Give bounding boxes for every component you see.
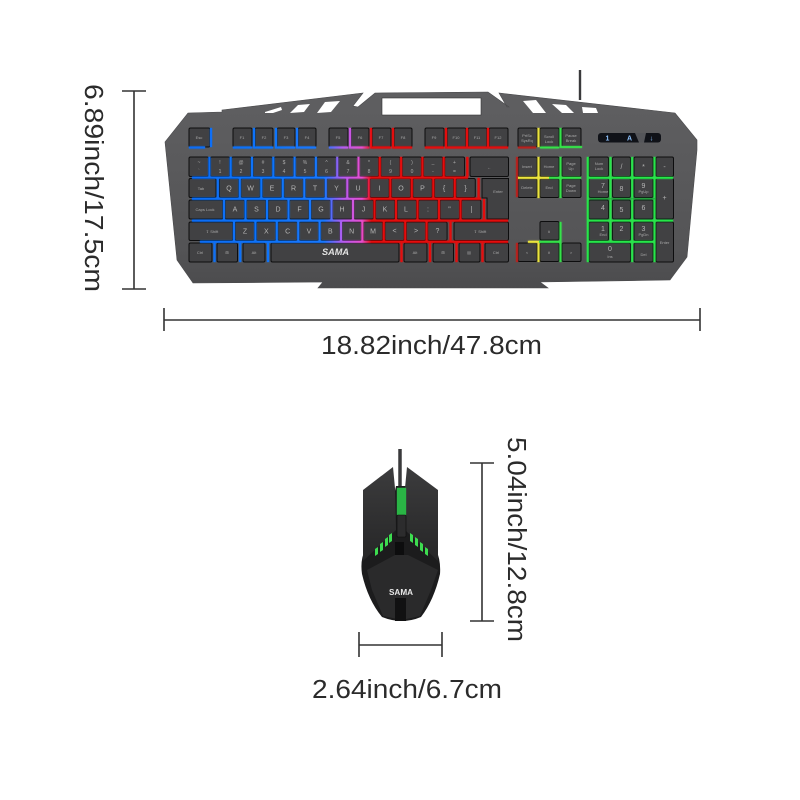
small key legends: F1 (240, 135, 245, 140)
small key legends: F12 (495, 135, 502, 140)
number row legends: 0 (411, 169, 414, 175)
ventilation slots (265, 100, 598, 113)
number row legends: * (368, 160, 370, 166)
letter and symbol legends: * (642, 164, 645, 171)
small key legends: F6 (358, 135, 363, 140)
number row legends: 4 (283, 169, 286, 175)
small key legends: > (570, 250, 573, 255)
letter and symbol legends: F (297, 206, 302, 214)
palm stripe (395, 598, 406, 621)
small key legends: Tab (198, 186, 205, 191)
small key legends: F9 (432, 135, 437, 140)
main block backlight (189, 128, 508, 262)
small key legends: End (599, 232, 607, 237)
small key legends: PrtSc (522, 133, 532, 138)
letter and symbol legends: L (404, 206, 408, 214)
letter and symbol legends: C (285, 228, 290, 236)
letter and symbol legends: 3 (642, 226, 646, 233)
left side lights (375, 533, 392, 556)
letter and symbol legends: S (254, 206, 259, 214)
number row legends: & (346, 160, 350, 166)
small key legends: Num (595, 161, 604, 166)
small key legends: Down (566, 188, 576, 193)
small key legends: Ins (607, 254, 613, 259)
small key legends: F11 (474, 135, 481, 140)
scroll base (395, 542, 404, 556)
small key legends: PgDn (638, 232, 649, 237)
letter and symbol legends: I (379, 186, 381, 192)
main key block (189, 157, 508, 262)
lock indicator panel: A (627, 136, 632, 142)
lock indicator panel: 1 (606, 136, 610, 142)
letter and symbol legends: M (370, 228, 376, 236)
letter and symbol legends: > (414, 228, 418, 235)
small key legends: Home (544, 164, 555, 169)
small key legends: Alt (252, 250, 257, 255)
left button (363, 467, 396, 561)
height dimension: mouse: 5.04inch/12.8cm (502, 437, 530, 642)
small key legends: End (545, 185, 553, 190)
letter and symbol legends: < (392, 228, 397, 235)
letter and symbol legends: : (427, 206, 429, 214)
small key legends: ▤ (467, 250, 471, 255)
small key legends: Break (566, 138, 576, 143)
height dimension: keyboard (79, 84, 146, 292)
number row legends: 5 (304, 169, 307, 175)
number row legends: ` (198, 169, 200, 175)
small key legends: Ctrl (493, 250, 499, 255)
letter and symbol legends: + (662, 195, 667, 202)
number row legends: @ (238, 160, 244, 166)
letter and symbol legends: / (621, 164, 623, 171)
navigation keys (518, 157, 581, 262)
mouse (361, 449, 440, 621)
letter and symbol legends: G (318, 206, 324, 214)
small key legends: Alt (413, 250, 418, 255)
letter and symbol legends: Z (243, 228, 248, 236)
keyboard (165, 92, 697, 288)
letter and symbol legends: 4 (601, 205, 605, 212)
letter and symbol legends: " (448, 206, 451, 214)
letter and symbol legends: 7 (601, 183, 605, 190)
letter and symbol legends: O (398, 186, 404, 192)
numeric keypad (589, 157, 674, 262)
height dimension: keyboard: 6.89inch/17.5cm (79, 84, 107, 292)
number row legends: 7 (347, 169, 350, 175)
small key legends: Enter (660, 240, 670, 245)
keyboard cable (579, 70, 581, 100)
small key legends: Esc (196, 135, 202, 140)
width dimension: keyboard (164, 308, 700, 360)
letter and symbol legends: 9 (642, 183, 646, 190)
right side lights (410, 533, 428, 556)
lock indicator panel (598, 133, 661, 142)
letter and symbol legends: E (270, 186, 275, 192)
mouse lower body (361, 486, 440, 621)
small key legends: ← (487, 165, 491, 170)
number row legends: _ (431, 160, 435, 166)
width dimension: mouse: 2.64inch/6.7cm (312, 676, 502, 704)
small key legends: F2 (262, 135, 267, 140)
number row legends: 6 (325, 169, 328, 175)
right button (405, 467, 438, 561)
letter and symbol legends: B (328, 228, 333, 236)
letter and symbol legends: D (275, 206, 281, 214)
mouse cable (398, 449, 402, 492)
number row legends: # (262, 160, 265, 166)
letter and symbol legends: { (443, 186, 446, 192)
letter and symbol legends: 2 (620, 226, 624, 233)
letter and symbol legends: 5 (620, 207, 624, 214)
small key legends: Home (598, 189, 609, 194)
number row legends (198, 160, 456, 175)
letter and symbol legends: | (471, 206, 473, 214)
number row legends: % (303, 160, 308, 166)
number row legends: ) (411, 160, 413, 166)
letter and symbol legends: N (349, 228, 354, 236)
letter and symbol legends: X (264, 228, 269, 236)
small key legends: Insert (522, 164, 533, 169)
small key legends: < (526, 250, 529, 255)
letter and symbol legends: 1 (601, 226, 605, 233)
small key legends: PgUp (638, 189, 649, 194)
small key legends: Delete (521, 185, 534, 190)
keyboard body (165, 92, 697, 288)
small key legends: Lock (595, 166, 603, 171)
height dimension: mouse (470, 437, 530, 642)
number row legends: ^ (325, 160, 328, 166)
lock indicator panel: ↓ (650, 136, 653, 142)
small key legends: Caps Lock (196, 207, 214, 212)
letter and symbol legends: J (362, 206, 365, 214)
letter and symbol legends: K (383, 206, 388, 214)
letter and symbol legends: R (291, 186, 296, 192)
number row legends: 2 (240, 169, 243, 175)
letter and symbol legends: W (247, 186, 254, 192)
small key legends: Scroll (544, 134, 554, 139)
letter and symbol legends: H (339, 206, 345, 214)
scroll wheel (397, 515, 406, 537)
width dimension: keyboard: 18.82inch/47.8cm (321, 332, 542, 360)
letter and symbol legends: A (233, 206, 238, 214)
number row legends: + (453, 160, 456, 166)
small key legends: ⊞ (225, 250, 229, 255)
carry handle cutout (382, 98, 481, 115)
small key legends: Up (568, 166, 574, 171)
number row legends: - (432, 169, 434, 175)
small key legends: ∨ (548, 250, 551, 255)
letter and symbol legends: Q (226, 186, 232, 192)
small key legends: F3 (284, 135, 289, 140)
letter and symbol legends: ? (436, 228, 440, 235)
number row legends: ( (390, 160, 392, 166)
number row legends: $ (283, 160, 286, 166)
nav and numpad backlight (517, 128, 673, 262)
letter and symbol legends: 0 (608, 246, 612, 253)
letter and symbol legends: U (355, 186, 361, 192)
letter and symbol legends: Y (334, 186, 339, 192)
number row legends: = (453, 169, 456, 175)
center light (397, 488, 406, 515)
small key legends: Page (566, 161, 576, 166)
letter and symbol legends: 8 (620, 186, 624, 193)
number row legends: 1 (219, 169, 222, 175)
letter and symbol legends (226, 164, 667, 253)
letter and symbol legends: P (420, 186, 425, 192)
small key legends: ⊞ (441, 250, 445, 255)
small key legends: F10 (453, 135, 460, 140)
width dimension: mouse (312, 632, 502, 704)
number row legends: 8 (368, 169, 371, 175)
function key row (189, 128, 581, 147)
spacebar brand: SAMA (322, 247, 349, 257)
small key legends: Lock (545, 139, 553, 144)
small key legends: Ctrl (197, 250, 203, 255)
letter and symbol legends: } (464, 186, 467, 192)
small key legends (196, 133, 670, 259)
letter and symbol legends: T (313, 186, 318, 192)
small key legends: SysRq (521, 138, 533, 143)
mouse brand: SAMA (389, 588, 413, 597)
small key legends: Del (640, 252, 647, 257)
number row legends: ~ (198, 160, 201, 166)
letter and symbol legends: V (307, 228, 312, 236)
number row legends: 3 (262, 169, 265, 175)
small key legends: Page (566, 183, 576, 188)
number row legends: 9 (389, 169, 392, 175)
letter and symbol legends: - (663, 164, 666, 171)
small key legends: F5 (336, 135, 341, 140)
letter and symbol legends: 6 (642, 205, 646, 212)
small key legends: Pause (565, 133, 577, 138)
palm cover (367, 555, 438, 620)
small key legends: F4 (305, 135, 310, 140)
small key legends: ⇧ Shift (474, 229, 487, 234)
small key legends: ⇧ Shift (206, 229, 219, 234)
small key legends: ∧ (548, 229, 551, 234)
small key legends: F7 (379, 135, 384, 140)
number row legends: ! (219, 160, 221, 166)
small key legends: F8 (401, 135, 406, 140)
small key legends: Enter (493, 189, 503, 194)
